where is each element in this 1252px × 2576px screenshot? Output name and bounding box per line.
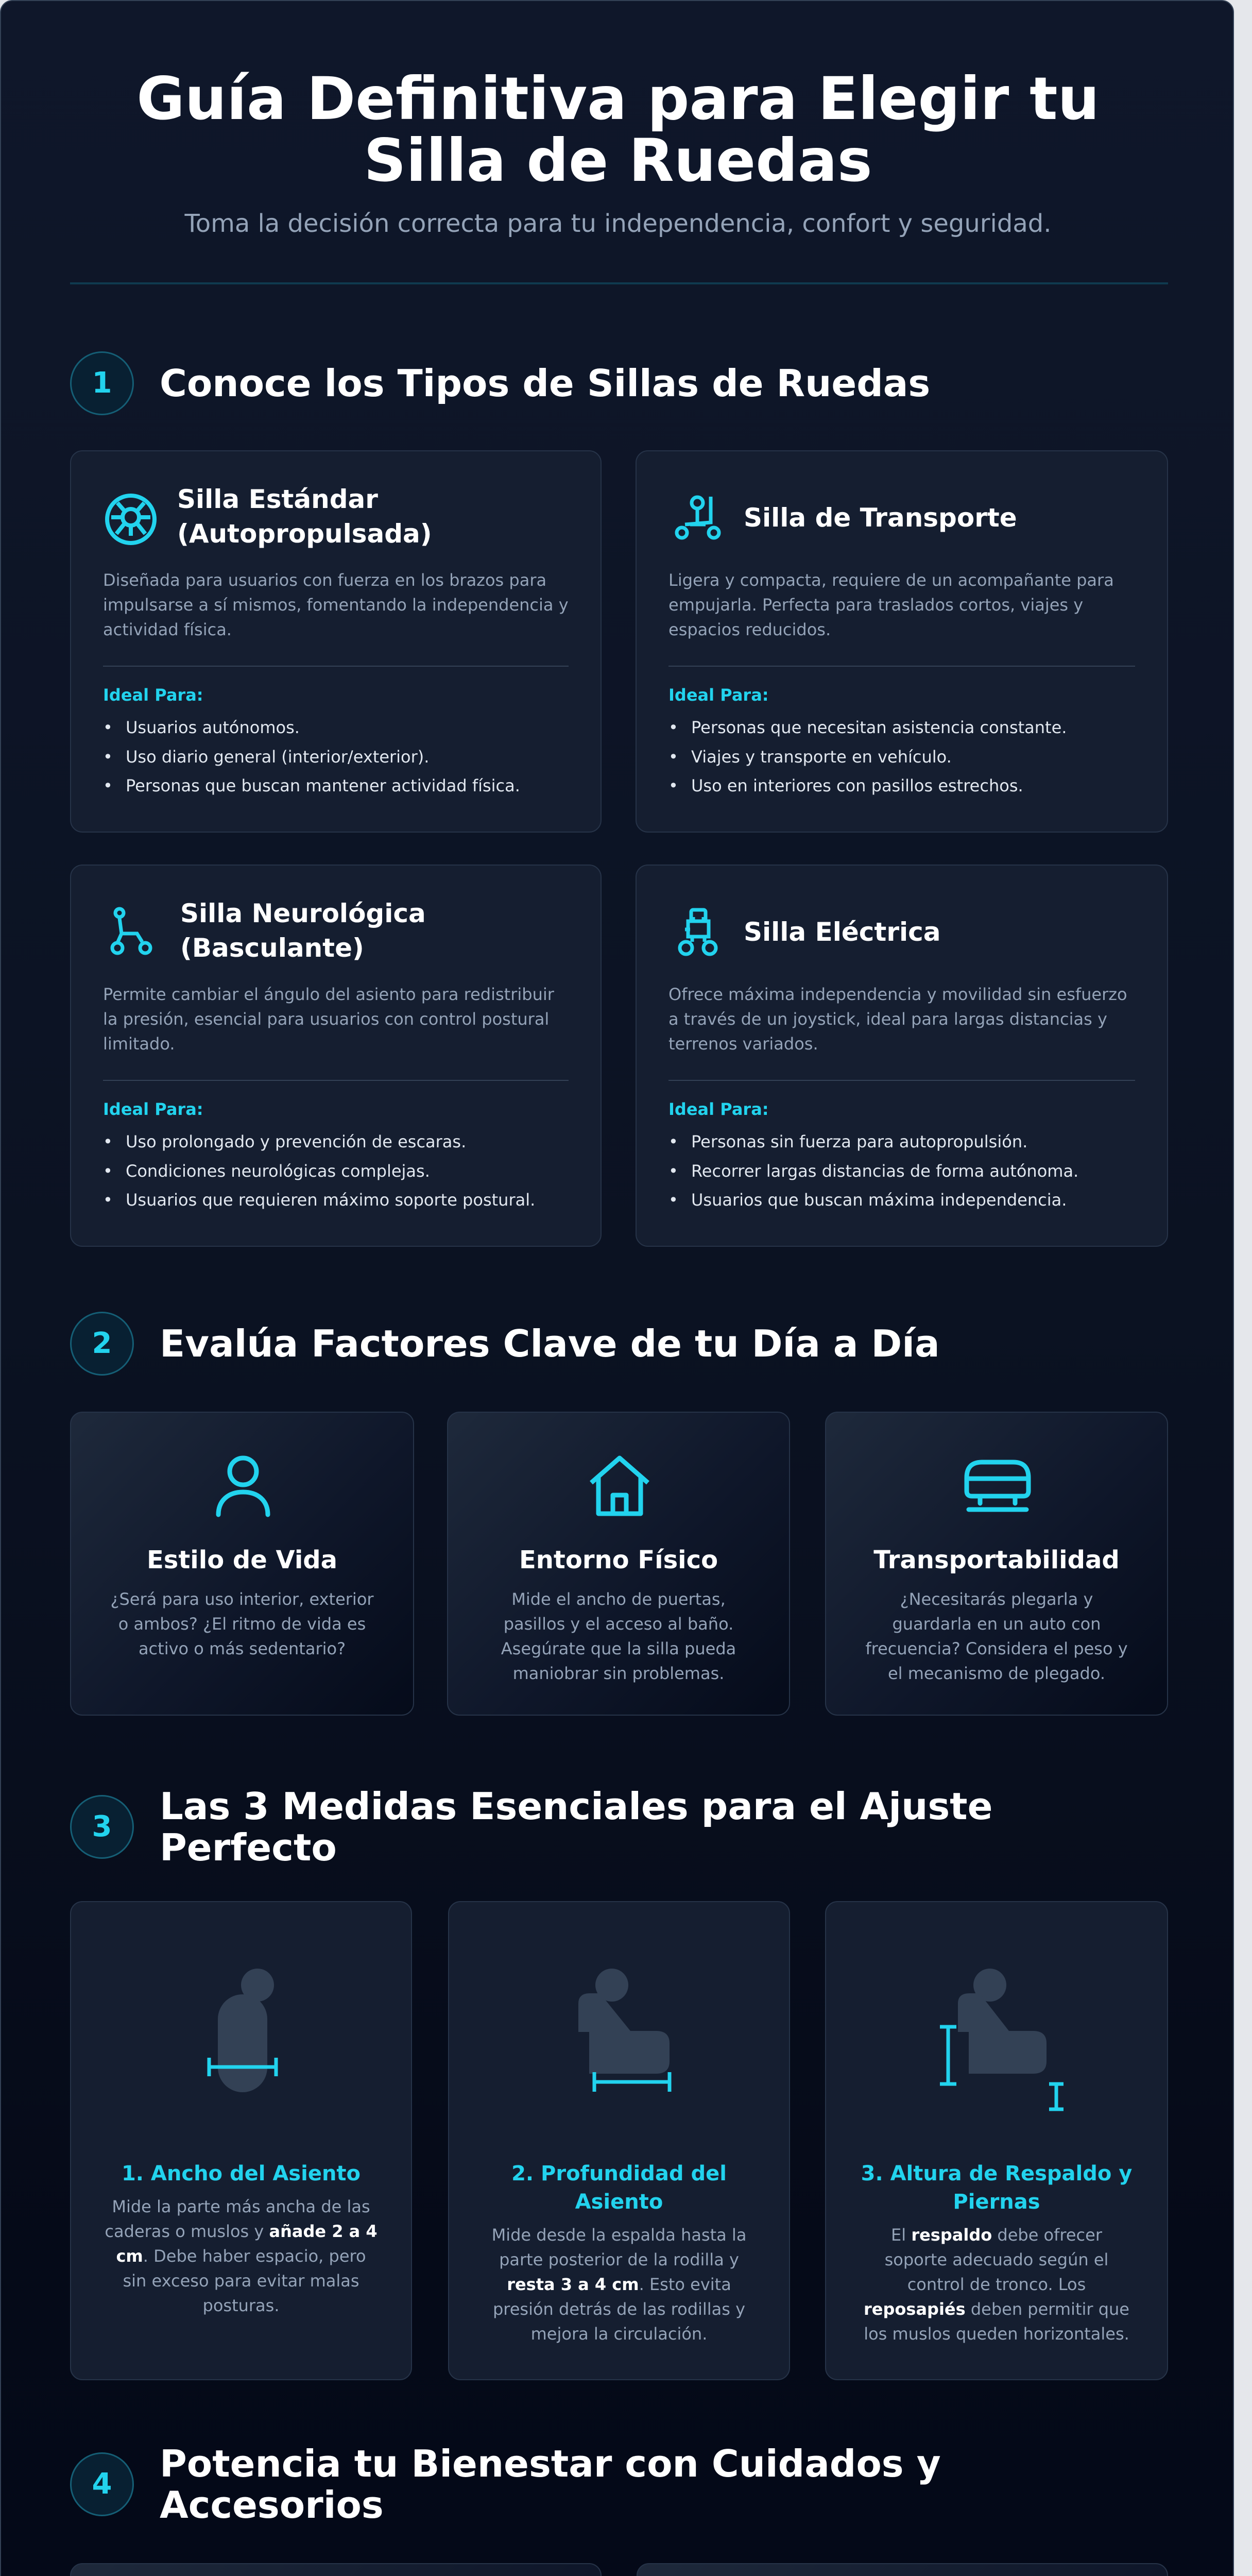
section 3 heading [160,1785,992,1869]
card title: Silla de Transporte [744,503,1017,533]
bullet list: Uso prolongado y prevención de escaras. [126,1132,466,1151]
text block: Mide la parte más ancha de las [112,2197,370,2216]
description [501,1589,736,1683]
bullet list: Condiciones neurológicas complejas. [126,1161,430,1181]
text block: resta 3 a 4 cm. Esto evita [507,2275,731,2294]
bullet list: Usuarios autónomos. [126,718,300,737]
description [103,570,569,639]
card title: (Basculante) [180,933,364,963]
text block: El respaldo debe ofrecer [891,2225,1102,2245]
description: activo o más sedentario? [139,1639,346,1658]
icon: transport [675,496,721,540]
panel: ancho del asiento [70,1901,412,2380]
figure: backrest height [940,1969,1064,2111]
text block: caderas o muslos y añade 2 a 4 [105,2222,378,2241]
bullet list [671,718,1067,795]
description: Permite cambiar el ángulo del asiento para redistribuir [103,985,554,1004]
text block: presión detrás de las rodillas y [493,2299,745,2319]
description: frecuencia? Considera el peso y [865,1639,1128,1658]
description: pasillos y el acceso al baño. [504,1614,733,1634]
ideal para label: Ideal Para: [668,1099,769,1119]
section 2 number badge: 2 [92,1327,112,1360]
panel: transportabilidad [825,1412,1168,1716]
section 3 heading: Las 3 Medidas Esenciales para el Ajuste [160,1785,992,1828]
panel: silla de transporte [636,450,1168,833]
description: impulsarse a sí mismos, fomentando la independencia y [103,595,569,615]
icon: electric chair [678,908,718,956]
description: empujarla. Perfecta para traslados cortos, viajes y [668,595,1083,615]
bullet list: Personas sin fuerza para autopropulsión. [691,1132,1027,1151]
panel: profundidad del asiento [448,1901,790,2380]
card title: Silla Eléctrica [744,917,940,947]
bullet list: Personas que necesitan asistencia constante. [691,718,1067,737]
card title: Silla Estándar [177,484,378,514]
description: espacios reducidos. [668,620,831,639]
ideal para label: Ideal Para: [103,685,203,705]
text block: 2. Profundidad del [511,2162,727,2185]
bullet list: Uso en interiores con pasillos estrechos. [691,776,1023,795]
text block: cm. Debe haber espacio, pero [116,2246,366,2266]
ideal para label: Ideal Para: [103,1099,203,1119]
bullet list: Usuarios que requieren máximo soporte postural. [126,1190,535,1210]
section 4 heading: Accesorios [160,2483,384,2527]
text block: reposapiés deben permitir que [864,2299,1129,2319]
description: ¿Será para uso interior, exterior [110,1589,374,1609]
description: ¿Necesitarás plegarla y [900,1589,1093,1609]
text block [492,2162,746,2344]
section 1 number badge: 1 [92,366,112,400]
text block [105,2162,378,2315]
bullet list: Viajes y transporte en vehículo. [691,747,952,767]
description [865,1589,1128,1683]
text block: los muslos queden horizontales. [864,2324,1129,2344]
title [136,64,1100,195]
text block: Mide desde la espalda hasta la [492,2225,746,2245]
section 4 heading [160,2442,941,2527]
section 2 heading: Evalúa Factores Clave de tu Día a Día [160,1322,940,1365]
section 4 number badge [70,2452,134,2516]
text block: parte posterior de la rodilla y [499,2250,739,2269]
text block: control de tronco. Los [907,2275,1086,2294]
bullet list: Personas que buscan mantener actividad física. [126,776,520,795]
description: la presión, esencial para usuarios con control postural [103,1009,549,1029]
panel: silla eléctrica [636,865,1168,1247]
description: a través de un joystick, ideal para largas distancias y [668,1009,1107,1029]
description: terrenos variados. [668,1034,818,1054]
card title: Silla Neurológica [180,899,426,928]
icon: house [590,1456,649,1516]
section 2 number badge [70,1312,134,1376]
bullet list [105,1132,535,1210]
panel: silla neurológica [70,865,602,1247]
title: Silla de Ruedas [364,126,872,195]
panel: entorno físico [447,1412,790,1716]
panel: altura de respaldo y piernas [825,1901,1168,2380]
panel: accesorios esenciales [637,2563,1168,2576]
subtitle: Toma la decisión correcta para tu independencia, confort y seguridad. [185,209,1051,238]
text block: 1. Ancho del Asiento [122,2162,361,2185]
section 4 number badge: 4 [92,2467,112,2501]
text block: soporte adecuado según el [885,2250,1108,2269]
description: Asegúrate que la silla pueda [501,1639,736,1658]
text block: Asiento [575,2190,663,2214]
bullet list: Usuarios que buscan máxima independencia. [691,1190,1067,1210]
panel: mantenimiento preventivo [70,2563,602,2576]
ideal para label: Ideal Para: [668,685,769,705]
description: Ofrece máxima independencia y movilidad sin esfuerzo [668,985,1127,1004]
section 3 heading: Perfecto [160,1826,337,1869]
description: guardarla en un auto con [892,1614,1101,1634]
description: maniobrar sin problemas. [513,1664,724,1683]
text block: mejora la circulación. [531,2324,707,2344]
card title: (Autopropulsada) [177,519,432,549]
section 4 heading: Potencia tu Bienestar con Cuidados y [160,2442,941,2485]
section 3 number badge [70,1795,134,1859]
card title [180,899,426,963]
section 3 number badge: 3 [92,1810,112,1843]
figure: seat width [207,1969,278,2092]
bullet list: Uso diario general (interior/exterior). [126,747,429,767]
panel: estilo de vida [70,1412,414,1716]
text block: 3. Altura de Respaldo y [861,2162,1132,2185]
text block: sin exceso para evitar malas [123,2271,359,2291]
card title [177,484,432,549]
section 1 number badge [70,351,134,415]
icon: reclining chair [110,907,152,955]
description [110,1589,374,1658]
description [668,985,1127,1054]
section 1 heading: Conoce los Tipos de Sillas de Ruedas [160,362,930,405]
description: Diseñada para usuarios con fuerza en los brazos para [103,570,546,590]
description: Ligera y compacta, requiere de un acompañante para [668,570,1114,590]
text block: posturas. [203,2296,279,2315]
description: Mide el ancho de puertas, [511,1589,726,1609]
icon: wheel [105,494,157,545]
bullet list: Recorrer largas distancias de forma autónoma. [691,1161,1078,1181]
title: Guía Definitiva para Elegir tu [136,64,1100,133]
description: limitado. [103,1034,175,1054]
description: o ambos? ¿El ritmo de vida es [118,1614,366,1634]
description [668,570,1114,639]
icon: person [216,1456,270,1517]
description: actividad física. [103,620,232,639]
card title: Entorno Físico [519,1546,718,1574]
panel: silla estándar [70,450,602,833]
bullet list [671,1132,1078,1210]
icon: car [964,1460,1031,1512]
bullet list [105,718,520,795]
description [103,985,554,1054]
figure: seat depth [578,1969,672,2092]
text block [861,2162,1132,2344]
text block: Piernas [953,2190,1040,2214]
card title: Transportabilidad [873,1546,1120,1574]
description: el mecanismo de plegado. [888,1664,1105,1683]
card title: Estilo de Vida [147,1546,337,1574]
